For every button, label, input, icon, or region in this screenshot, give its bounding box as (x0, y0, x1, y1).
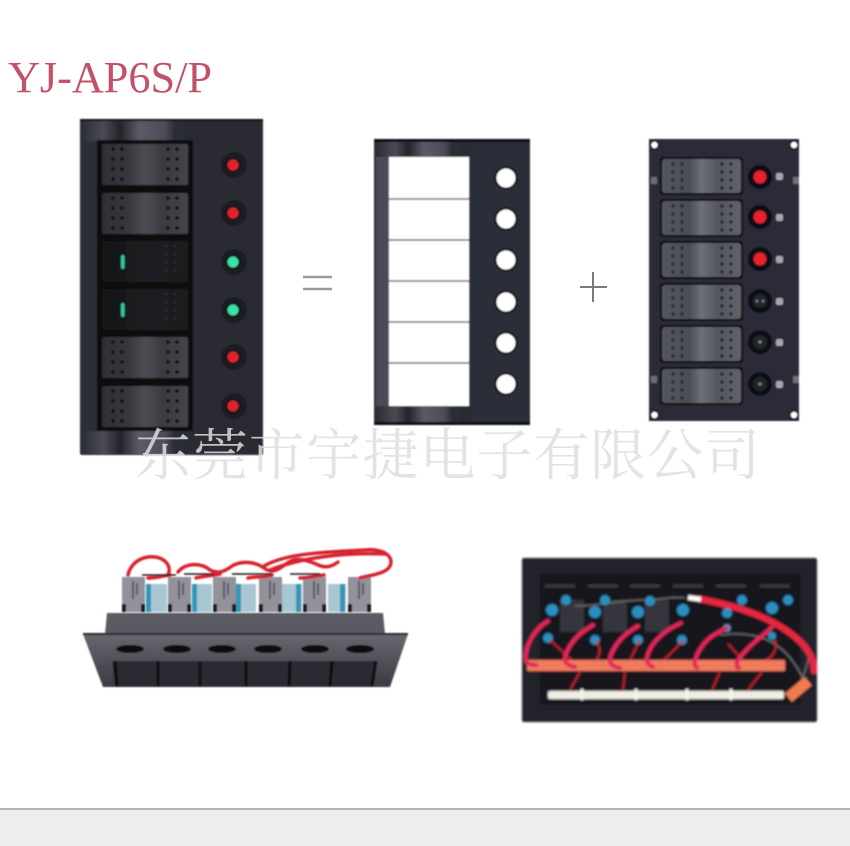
panel: assembled switch panel (80, 119, 263, 455)
photo: rear open view with wiring (522, 558, 817, 722)
white bus bar (548, 691, 784, 699)
front flange (83, 634, 408, 687)
bottom strip (0, 808, 850, 846)
rocker switch 3 lit green (100, 238, 190, 285)
side clips (651, 177, 799, 383)
red loop wires (526, 621, 773, 668)
switch back bodies (560, 600, 669, 632)
photo: rear side view with wiring (83, 550, 408, 687)
rocker switch 6 (100, 383, 190, 430)
rocker switch 5 (100, 334, 190, 381)
small status lamps (776, 173, 783, 388)
indicator lights (221, 152, 247, 419)
thin red wires (550, 640, 776, 690)
top labels (545, 584, 790, 588)
equals sign (303, 277, 332, 289)
thick red wire (700, 599, 814, 671)
title: YJ-AP6S/P (8, 53, 212, 102)
orange heat shrink bus (527, 660, 785, 671)
rocker 6 (660, 367, 743, 405)
rear housing (105, 613, 385, 634)
rocker 2 (660, 199, 743, 237)
blue terminals (543, 595, 793, 645)
rocker 4 (660, 283, 743, 321)
panel: switch base plate (649, 139, 799, 421)
indicator holes (496, 168, 516, 394)
rocker switch 1 (100, 141, 190, 188)
mounting screw holes (650, 141, 798, 419)
blue fuse blocks (146, 584, 346, 612)
rocker 3 (660, 241, 743, 279)
rocker switch 2 (100, 190, 190, 237)
switch window (389, 157, 469, 406)
flange slots (116, 645, 374, 653)
rocker bottoms (112, 661, 377, 687)
plus sign (580, 272, 607, 302)
grey sense wires (575, 597, 810, 688)
rocker switch 4 lit green (100, 286, 190, 333)
terminals (122, 577, 145, 612)
breaker buttons (748, 165, 772, 396)
rocker 5 (660, 325, 743, 363)
rocker 1 (660, 157, 743, 195)
red wires (128, 550, 391, 578)
panel: front cover frame (374, 139, 530, 425)
watermark: 东莞市宇捷电子有限公司 (135, 426, 760, 488)
